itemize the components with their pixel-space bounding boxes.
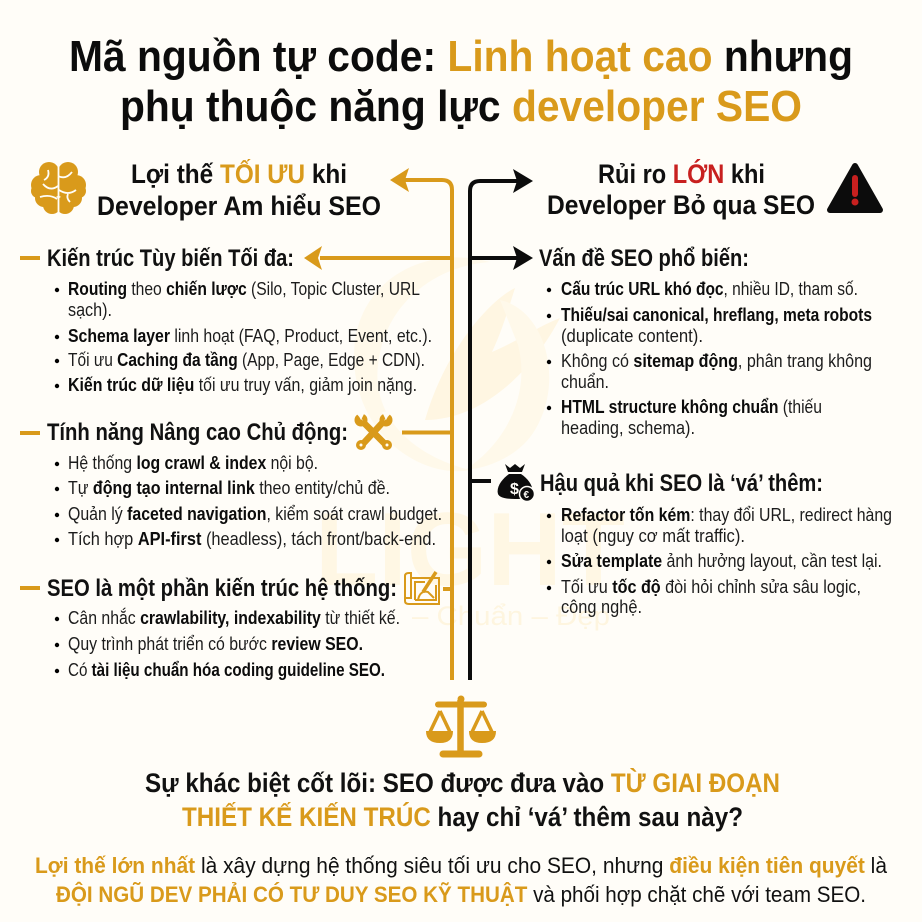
watermark logo: [315, 257, 625, 631]
icon: crossed wrenches: [354, 411, 393, 450]
gold arrow tree: [20, 168, 452, 680]
bullet list: system: Có tài liệu chuẩn hóa coding guideline SEO.: [68, 660, 385, 680]
bullet list: issues: HTML structure không chuẩn (thiếu: [561, 397, 822, 417]
icon: money bag: $: [510, 481, 519, 498]
panel: advantages: [31, 157, 442, 680]
black arrow tree: [470, 169, 533, 680]
bullet list: issues: chuẩn.: [561, 372, 609, 392]
title: Mã nguồn tự code: Linh hoạt cao nhưng: [69, 32, 853, 81]
section: common issues: Vấn đề SEO phổ biến:: [539, 245, 749, 272]
conclusion text: ĐỘI NGŨ DEV PHẢI CÓ TƯ DUY SEO KỸ THUẬT và phối hợp chặt chẽ với team SEO.: [56, 882, 866, 907]
section: system architecture: [47, 572, 439, 680]
bullet list: issues: Thiếu/sai canonical, hreflang, meta robots: [561, 305, 872, 325]
bullet list: consequences: Tối ưu tốc độ đòi hỏi chỉnh sửa sâu logic,: [561, 577, 861, 597]
icon: blueprint: [405, 572, 439, 604]
bullet list: issues: (duplicate content).: [561, 326, 703, 346]
bullet list: architecture: Schema layer linh hoạt (FAQ, Product, Event, etc.).: [68, 326, 432, 346]
bullet list: features: [55, 453, 442, 549]
bullet list: issues: Cấu trúc URL khó đọc, nhiều ID, tham số.: [561, 279, 858, 299]
bullet list: consequences: Refactor tốn kém: thay đổi URL, redirect hàng: [561, 505, 892, 525]
heading: advantages: [97, 157, 381, 221]
title: phụ thuộc năng lực developer SEO: [120, 82, 802, 131]
bullet list: features: Tích hợp API-first (headless), tách front/back-end.: [68, 529, 436, 549]
section: architecture: [47, 245, 432, 395]
title: [69, 32, 853, 131]
callout: core difference: THIẾT KẾ KIẾN TRÚC hay chỉ ‘vá’ thêm sau này?: [182, 801, 743, 832]
bullet list: system: Cân nhắc crawlability, indexability từ thiết kế.: [68, 607, 400, 628]
heading: advantages: Lợi thế TỐI ƯU khi: [131, 157, 347, 189]
panel: risks: [498, 158, 892, 617]
watermark logo: LIGHT: [315, 492, 625, 608]
bullet list: system: [55, 607, 400, 680]
arrow: black issues: [513, 246, 533, 270]
conclusion text: [35, 853, 888, 907]
bullet list: issues: heading, schema).: [561, 418, 695, 438]
heading: risks: Developer Bỏ qua SEO: [547, 190, 815, 220]
bullet list: features: Tự động tạo internal link theo entity/chủ đề.: [68, 478, 390, 498]
bullet list: architecture: Routing theo chiến lược (Silo, Topic Cluster, URL: [68, 279, 420, 299]
bullet list: consequences: Sửa template ảnh hưởng layout, cần test lại.: [561, 551, 882, 571]
arrow: gold top: [390, 168, 409, 192]
bullet list: features: Quản lý faceted navigation, kiểm soát crawl budget.: [68, 504, 442, 524]
section: architecture: Kiến trúc Tùy biến Tối đa:: [47, 245, 294, 272]
watermark logo: – Chuẩn – Đẹp: [412, 601, 610, 631]
bullet list: consequences: loạt (nguy cơ mất traffic).: [561, 526, 745, 546]
callout: core difference: [145, 767, 780, 832]
bullet list: system: Quy trình phát triển có bước review SEO.: [68, 634, 363, 654]
heading: risks: [547, 158, 815, 220]
icon: warning triangle: [830, 166, 880, 210]
callout: core difference: Sự khác biệt cốt lõi: SEO được đưa vào TỪ GIAI ĐOẠN: [145, 767, 780, 798]
heading: advantages: Developer Am hiểu SEO: [97, 191, 381, 221]
section: system architecture: SEO là một phần kiến trúc hệ thống:: [47, 575, 397, 602]
icon: money bag: €: [524, 490, 530, 501]
section: common issues: [539, 245, 872, 438]
bullet list: architecture: Kiến trúc dữ liệu tối ưu truy vấn, giảm join nặng.: [68, 375, 417, 395]
section: consequences: Hậu quả khi SEO là ‘vá’ thêm:: [540, 470, 823, 497]
bullet list: issues: [547, 279, 872, 438]
heading: risks: Rủi ro LỚN khi: [598, 158, 765, 189]
icon: brain: [31, 160, 86, 216]
arrow: black top: [513, 169, 533, 193]
bullet list: consequences: công nghệ.: [561, 597, 642, 617]
bullet list: architecture: Tối ưu Caching đa tầng (App, Page, Edge + CDN).: [68, 350, 425, 370]
section: consequences: [498, 464, 892, 617]
bullet list: issues: Không có sitemap động, phân trang không: [561, 351, 872, 371]
section: advanced features: Tính năng Nâng cao Chủ động:: [47, 419, 348, 446]
bullet list: consequences: [547, 505, 892, 617]
bullet list: features: Hệ thống log crawl & index nội bộ.: [68, 453, 318, 473]
section: advanced features: [47, 411, 442, 549]
icon: balance scale: [426, 696, 496, 754]
arrow: gold architecture: [304, 246, 322, 270]
icon: money bag: [498, 464, 534, 502]
bullet list: architecture: [55, 279, 432, 395]
bullet list: architecture: sạch).: [68, 300, 112, 320]
conclusion text: Lợi thế lớn nhất là xây dựng hệ thống siêu tối ưu cho SEO, nhưng điều kiện tiên quyết là: [35, 853, 888, 878]
